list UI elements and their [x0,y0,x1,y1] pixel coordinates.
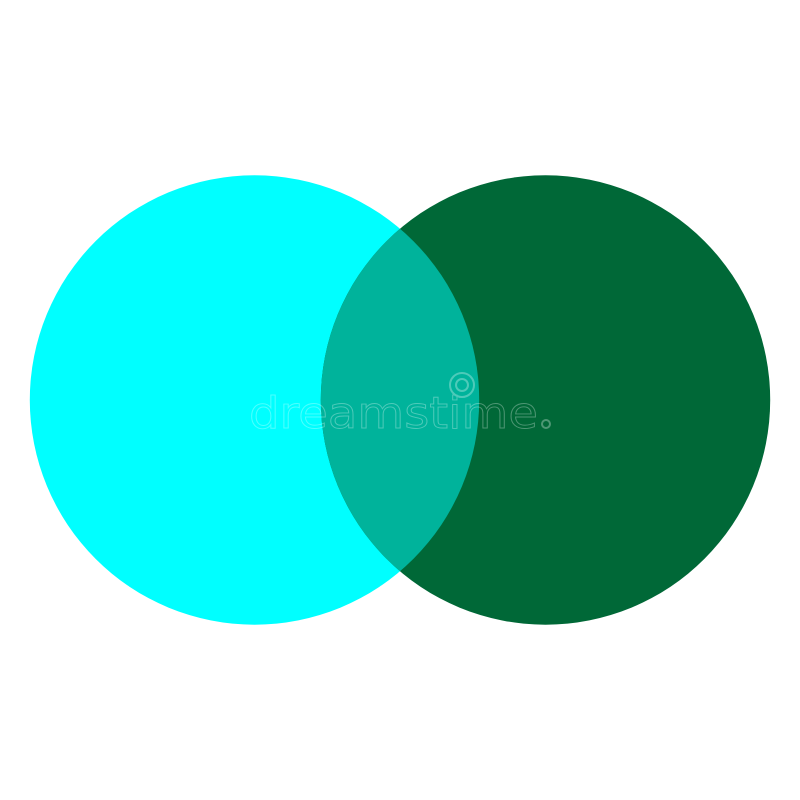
circle: left cyan [30,175,479,625]
circle: right dark green [321,175,770,625]
watermark spiral icon [450,373,474,397]
venn diagram [30,175,770,625]
watermark: dreamstime [249,373,550,439]
overlap: teal intersection [320,229,480,571]
watermark text: dreamstime [249,388,538,439]
watermark registered mark [542,420,550,428]
